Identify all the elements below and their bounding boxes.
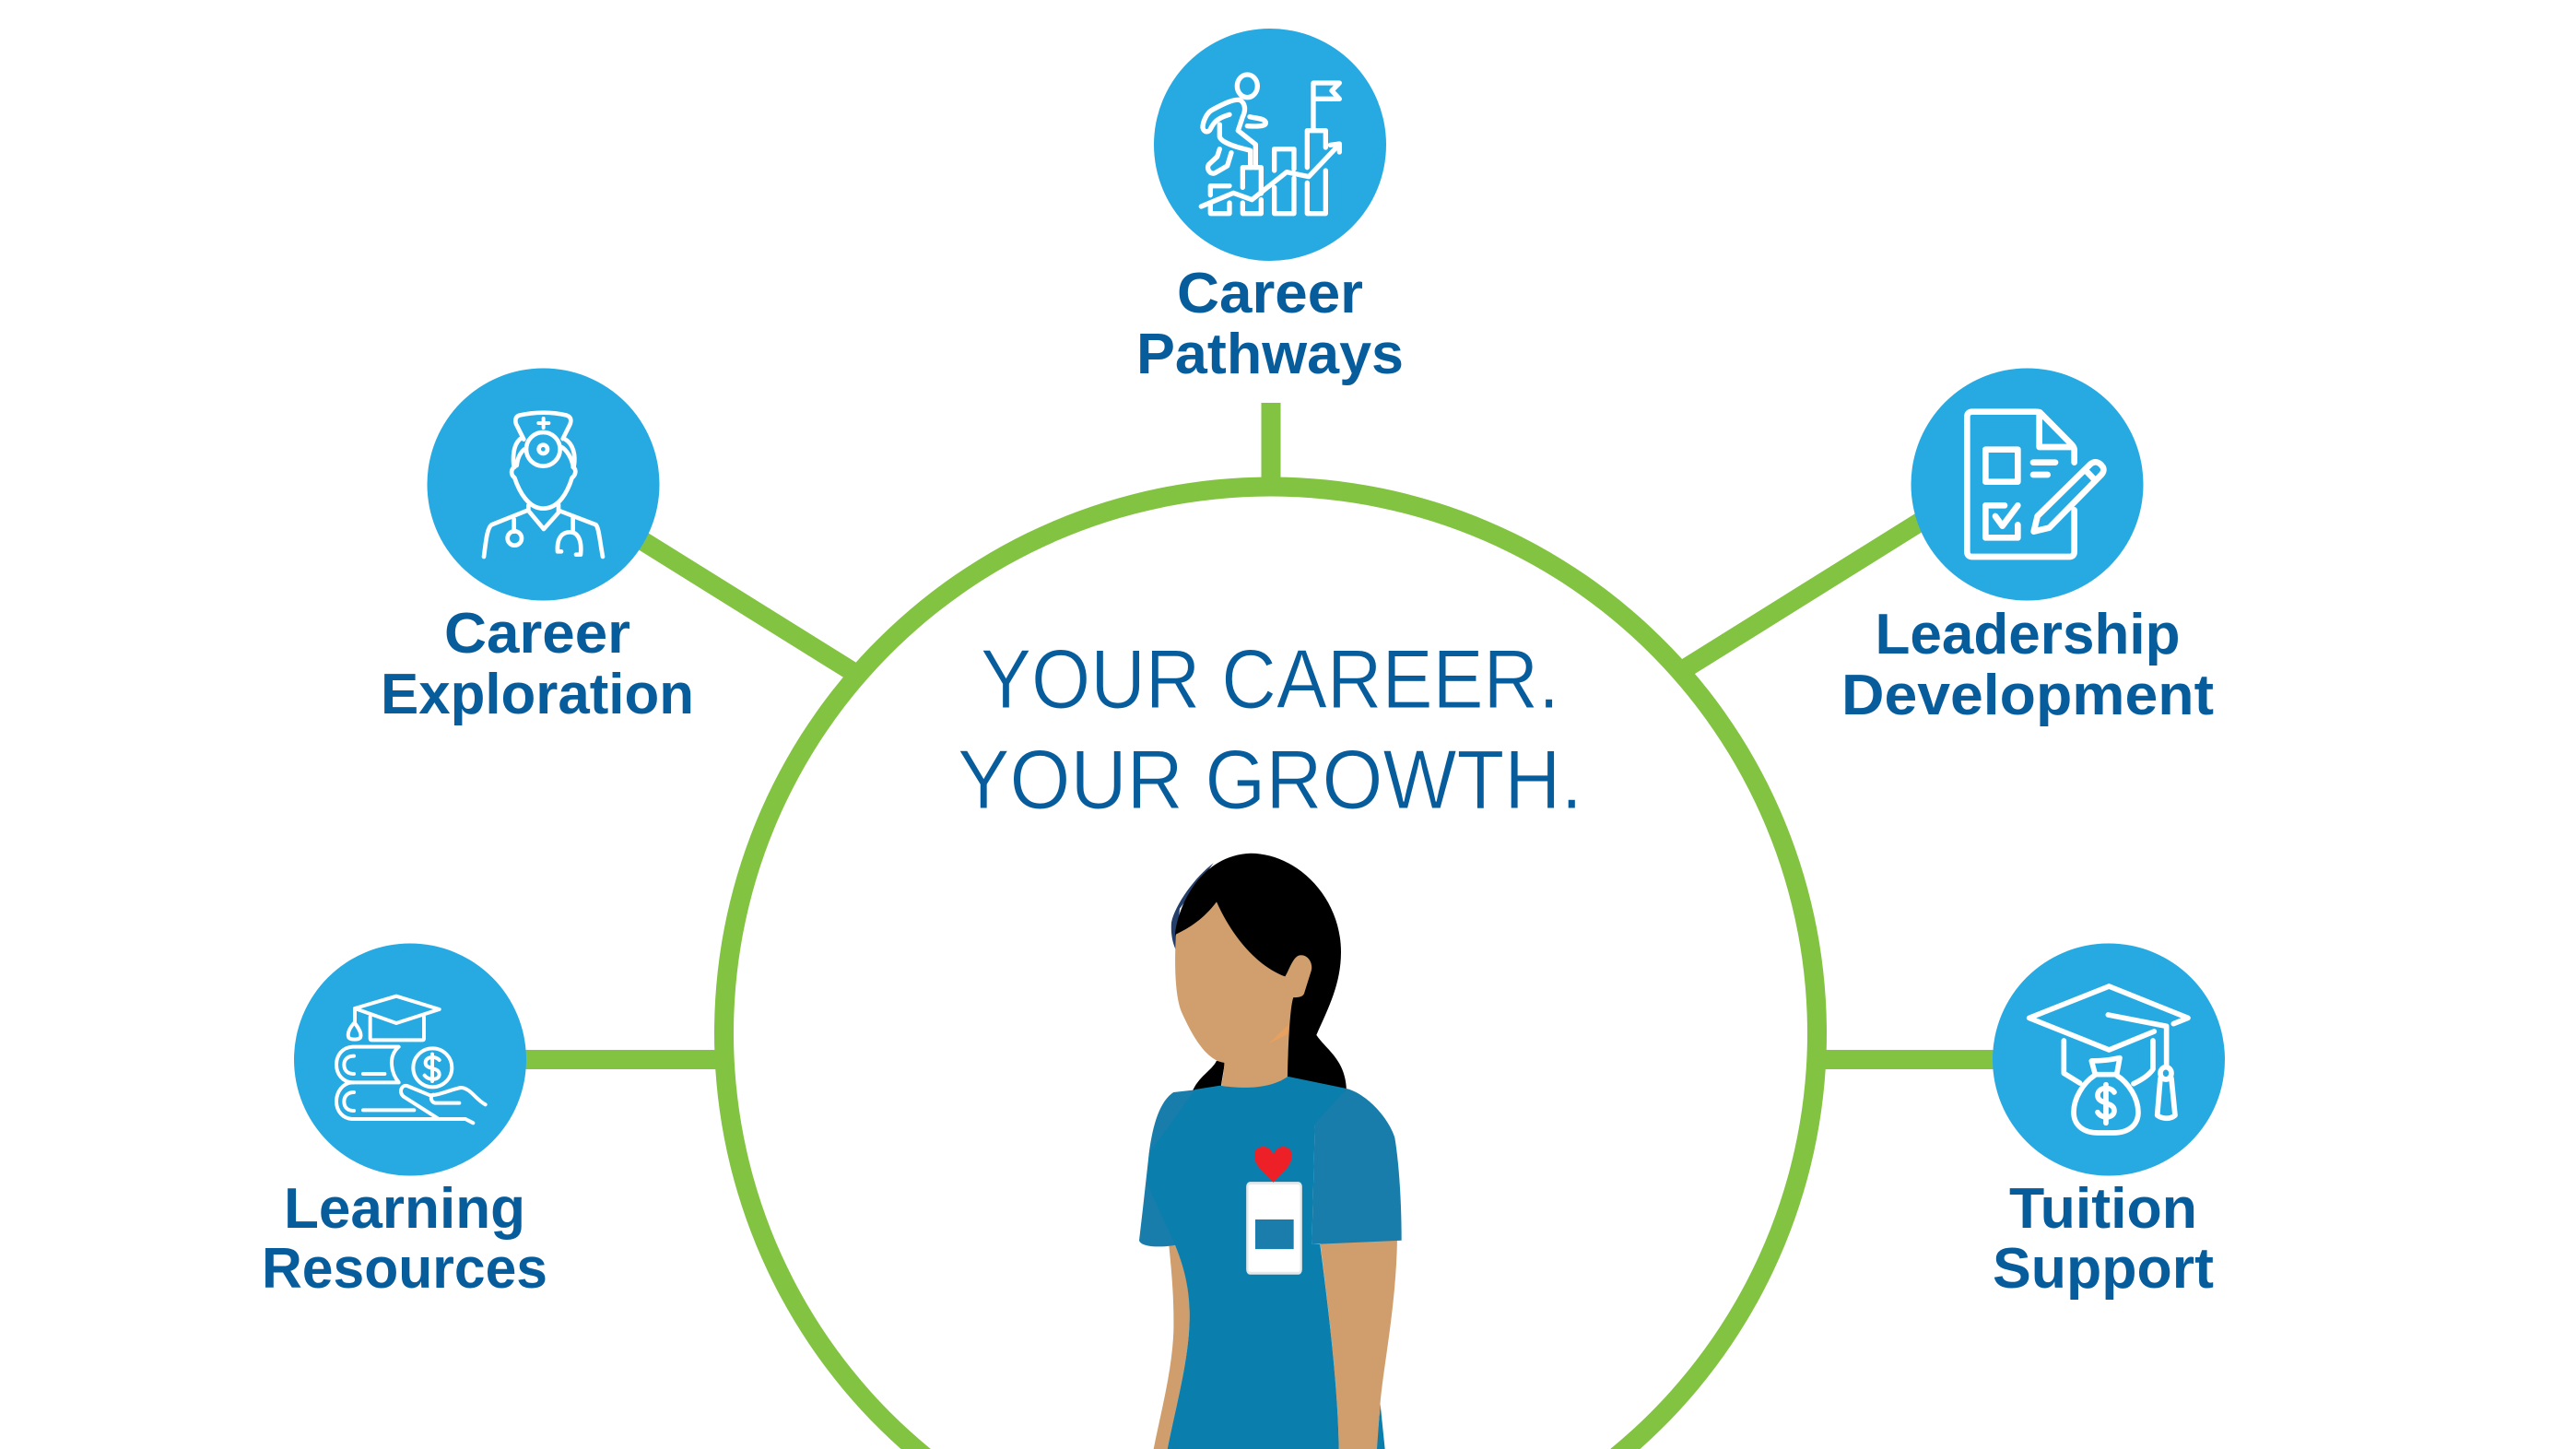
spokes connecting hub to nodes [516,403,2000,1060]
label: tuition support [1993,1177,2214,1301]
label: learning resources [262,1177,547,1301]
node: career pathways [1136,29,1404,386]
label: leadership development: Development [1841,664,2214,727]
node: career exploration [381,369,694,726]
label: learning resources: Resources [262,1237,547,1301]
label: tuition support: Support [1993,1237,2214,1301]
title: your career your growth: YOUR GROWTH. [958,734,1582,827]
node: tuition support [1993,944,2225,1301]
label: career exploration [381,602,694,726]
label: learning resources: Learning [284,1177,525,1241]
icon: checklist and pencil [1967,412,2103,557]
label: career exploration: Career [444,602,630,666]
icon: graduation cap and money bag [2029,986,2188,1133]
label: leadership development [1841,603,2214,727]
label: leadership development: Leadership [1875,603,2181,666]
node: learning resources [262,944,547,1301]
illustration: healthcare worker [1139,854,1402,1449]
title: your career your growth: YOUR CAREER. [981,633,1559,726]
icon: nurse with stethoscope [484,413,603,557]
title: your career your growth [958,633,1582,827]
label: career pathways: Pathways [1136,323,1404,386]
id badge [1247,1184,1301,1273]
node: leadership development [1841,369,2214,727]
label: career pathways [1136,262,1404,386]
icon: books, cap and coin [336,996,486,1123]
label: tuition support: Tuition [2009,1177,2197,1241]
central hub ring [714,477,1827,1449]
label: career pathways: Career [1177,262,1363,325]
icon: heart [1254,1147,1292,1183]
icon: person climbing bars [1201,75,1339,214]
label: career exploration: Exploration [381,663,694,726]
